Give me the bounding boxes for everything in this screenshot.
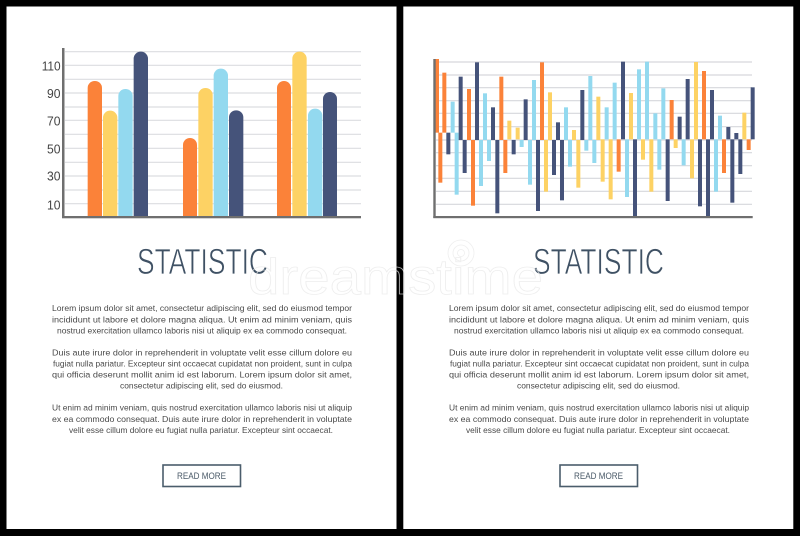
chart: rounded bars: 70 xyxy=(47,114,61,128)
chart: rounded bars: 50 xyxy=(47,142,61,156)
text block: body copy: velit esse cillum dolore eu fugiat nulla pariatur. Excepteur sint occaecat. xyxy=(466,425,730,435)
text block: body copy: Ut enim ad minim veniam, quis nostrud exercitation ullamco laboris nisi ut aliquip xyxy=(52,402,352,412)
chart: diverging bars xyxy=(433,59,755,218)
text block: body copy: velit esse cillum dolore eu fugiat nulla pariatur. Excepteur sint occaecat. xyxy=(69,425,333,435)
chart: rounded bars: 30 xyxy=(47,170,61,184)
chart: rounded bars: 90 xyxy=(47,87,61,101)
text block: body copy: Lorem ipsum dolor sit amet, consectetur adipiscing elit, sed do eiusmod tempor xyxy=(52,303,352,313)
text block: body copy: Duis aute irure dolor in reprehenderit in voluptate velit esse cillum dolore eu xyxy=(52,347,352,357)
text block: body copy: ex ea commodo consequat. Duis aute irure dolor in reprehenderit in voluptate xyxy=(449,414,749,424)
text block: body copy: ex ea commodo consequat. Duis aute irure dolor in reprehenderit in voluptate xyxy=(52,414,352,424)
button: read more xyxy=(163,465,240,486)
button: read more: READ MORE xyxy=(574,470,623,481)
chart: rounded bars xyxy=(42,48,361,218)
heading: statistic: STATISTIC xyxy=(533,241,664,282)
text block: body copy: fugiat nulla pariatur. Excepteur sint occaecat cupidatat non proident, sunt in culpa xyxy=(53,358,352,368)
text block: body copy: incididunt ut labore et dolore magna aliqua. Ut enim ad minim veniam, quis xyxy=(449,314,749,324)
text block: body copy: qui officia deserunt mollit anim id est laborum. Lorem ipsum dolor sit amet, xyxy=(52,369,352,379)
watermark: dreamstime xyxy=(248,249,543,305)
text block: body copy: nostrud exercitation ullamco laboris nisi ut aliquip ex ea commodo consequat. xyxy=(57,325,347,335)
text block: body copy: Lorem ipsum dolor sit amet, consectetur adipiscing elit, sed do eiusmod tempor xyxy=(449,303,749,313)
text block: body copy: nostrud exercitation ullamco laboris nisi ut aliquip ex ea commodo consequat. xyxy=(454,325,744,335)
text block: body copy: Ut enim ad minim veniam, quis nostrud exercitation ullamco laboris nisi ut aliquip xyxy=(449,402,749,412)
text block: body copy: incididunt ut labore et dolore magna aliqua. Ut enim ad minim veniam, quis xyxy=(52,314,352,324)
text block: body copy xyxy=(52,303,352,435)
text block: body copy: Duis aute irure dolor in reprehenderit in voluptate velit esse cillum dolore eu xyxy=(449,347,749,357)
text block: body copy: fugiat nulla pariatur. Excepteur sint occaecat cupidatat non proident, sunt in culpa xyxy=(450,358,749,368)
panel: grouped bar chart xyxy=(6,6,396,529)
heading: statistic: STATISTIC xyxy=(137,241,268,282)
panel: diverging bar chart xyxy=(403,6,793,529)
text block: body copy xyxy=(449,303,749,435)
text block: body copy: consectetur adipiscing elit, sed do eiusmod. xyxy=(517,380,680,390)
button: read more xyxy=(560,465,638,486)
text block: body copy: consectetur adipiscing elit, sed do eiusmod. xyxy=(120,380,283,390)
button: read more: READ MORE xyxy=(177,470,226,481)
chart: rounded bars: 10 xyxy=(47,198,61,212)
text block: body copy: qui officia deserunt mollit anim id est laborum. Lorem ipsum dolor sit amet, xyxy=(449,369,749,379)
chart: rounded bars: 110 xyxy=(42,60,61,74)
